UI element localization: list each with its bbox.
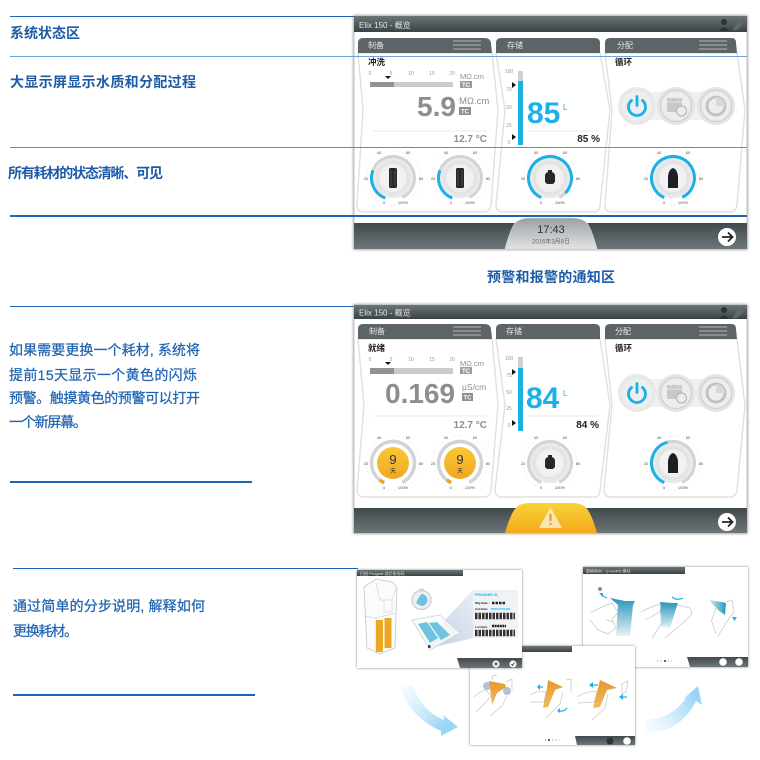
panel: preparation: TC <box>464 396 472 402</box>
gauge: cartridge 2 <box>431 150 491 206</box>
panel: dispensing: 分配 <box>615 327 631 336</box>
label: system status area: 系统状态区 <box>10 25 80 41</box>
gauge: tank: 100% <box>555 200 566 205</box>
gauge: final filter <box>644 435 704 491</box>
panel: preparation: 20 <box>449 357 455 363</box>
gauge: cartridge 2, 9 days <box>431 435 491 491</box>
gauge: cartridge 2: 40 <box>444 150 449 155</box>
text block: step-by-step explanation: 更换耗材。 <box>13 623 78 639</box>
bottom bar with clock <box>354 218 747 249</box>
gauge: cartridge 2, 9 days: 9 <box>456 452 464 467</box>
gauge: cartridge 1, 9 days <box>364 435 424 491</box>
label: consumables status: 所有耗材的状态清晰、可见 <box>8 165 163 181</box>
panel: storage <box>495 324 610 497</box>
panel: storage: 存储 <box>506 326 522 336</box>
gauge: final filter: 20 <box>644 176 649 181</box>
gauge: cartridge 2: 20 <box>431 176 436 181</box>
bottom bar with clock: 17:43 <box>537 224 565 236</box>
gauge: cartridge 2: 100% <box>465 200 476 205</box>
panel: storage: L <box>563 389 568 398</box>
panel: storage: 85 % <box>577 134 600 145</box>
screen A: identification of consumable <box>357 570 522 668</box>
panel: preparation: 0 <box>369 71 372 77</box>
panel: storage: 100 <box>505 356 513 362</box>
step: squeeze <box>474 675 512 716</box>
panel: dispensing: 循环 <box>615 57 633 67</box>
illustration: box and magnifier <box>412 590 473 650</box>
panel: preparation <box>357 324 498 497</box>
panel: storage: 0 <box>508 423 511 429</box>
gauge: cartridge 2: 60 <box>473 150 478 155</box>
gauge: cartridge 2, 9 days: 80 <box>486 461 491 466</box>
panel: preparation: 制备 <box>368 40 384 50</box>
illustration: timer <box>412 589 431 610</box>
step: twist <box>530 679 571 718</box>
illustration: water system cabinet <box>364 579 397 654</box>
gauge: cartridge 1, 9 days: 9 <box>389 452 397 467</box>
gauge: final filter: 40 <box>657 435 662 440</box>
screen C: hands with blue cartridge: 更换耗材 - Q-GARD 模块 <box>586 568 631 574</box>
panel: storage: 100 <box>505 69 513 75</box>
gauge: cartridge 2, 9 days: 100% <box>465 485 476 490</box>
gauge: cartridge 2: 80 <box>486 176 491 181</box>
gauge: final filter: 80 <box>699 176 704 181</box>
panel: preparation: 制备 <box>369 326 385 336</box>
gauge: cartridge 1, 9 days: 0 <box>383 485 386 490</box>
panel: storage: L <box>563 103 568 112</box>
panel: preparation: 0 <box>369 357 372 363</box>
gauge: cartridge 2, 9 days: 60 <box>473 435 478 440</box>
gauge: final filter <box>644 150 704 206</box>
gauge: cartridge 1: 80 <box>419 176 424 181</box>
panel: preparation: 15 <box>429 357 435 363</box>
panel: preparation: 15 <box>429 71 435 77</box>
gauge: cartridge 1 <box>364 150 424 206</box>
gauge: cartridge 1: 20 <box>364 176 369 181</box>
screen 2 frame <box>354 305 747 533</box>
arrow: up to step 3 <box>645 686 702 733</box>
label: alert notification area: 预警和报警的通知区 <box>487 269 615 285</box>
panel: preparation: 12.7 °C <box>454 134 487 145</box>
panel: storage: 0 <box>508 140 511 146</box>
gauge: cartridge 2, 9 days: 天 <box>457 468 463 475</box>
panel: preparation: 就绪 <box>368 343 386 353</box>
panel: preparation: TC <box>462 83 471 89</box>
panel: preparation: TC <box>462 369 471 375</box>
gauge: tank: 100% <box>555 485 566 490</box>
gauge: final filter: 100% <box>678 485 689 490</box>
gauge: cartridge 2: 0 <box>450 200 453 205</box>
arrow: down to step 2 <box>400 685 458 736</box>
panel: storage <box>496 38 610 212</box>
panel: preparation: 12.7 °C <box>454 420 487 431</box>
text block: warning explanation <box>9 342 200 430</box>
screen B: hands with orange cartridge <box>470 646 635 745</box>
panel: preparation <box>357 38 498 212</box>
step: remove <box>577 680 628 720</box>
text block: warning explanation: 预警。触摸黄色的预警可以打开 <box>9 390 200 406</box>
panel: storage: 84 <box>526 382 560 415</box>
gauge: cartridge 1: 0 <box>383 200 386 205</box>
panel: preparation: MΩ.cm <box>459 96 489 107</box>
screen 1: overview <box>354 16 747 249</box>
gauge: tank <box>521 435 581 491</box>
label: barcode card: PROGTS0J01 <box>491 607 511 611</box>
panel: preparation: 10 <box>408 357 414 363</box>
gauge: final filter: 60 <box>686 150 691 155</box>
label: large display: 大显示屏显示水质和分配过程 <box>10 74 196 90</box>
panel: storage: 85 <box>527 97 560 130</box>
gauge: cartridge 1, 9 days: 60 <box>406 435 411 440</box>
panel: dispensing <box>605 38 745 212</box>
gauge: final filter: 0 <box>663 200 666 205</box>
screen 1 title bar: Elix 150 - 概览 <box>359 20 411 30</box>
icon group: power, calendar, pie <box>618 87 735 125</box>
gauge: tank: 80 <box>576 461 581 466</box>
gauge: cartridge 2, 9 days: 0 <box>450 485 453 490</box>
panel: preparation: MΩ.cm <box>460 359 484 368</box>
gauge: final filter: 20 <box>644 461 649 466</box>
panel: preparation: 5 <box>390 357 393 363</box>
gauge: tank: 20 <box>521 461 526 466</box>
screen 2 title bar <box>354 305 747 319</box>
label: barcode card: Cat Num. <box>475 607 488 611</box>
panel: dispensing <box>604 324 745 497</box>
gauge: cartridge 1, 9 days: 20 <box>364 461 369 466</box>
text block: warning explanation: 如果需要更换一个耗材, 系统将 <box>9 342 200 358</box>
gauge: final filter: 80 <box>699 461 704 466</box>
panel: preparation: 冲洗 <box>368 57 386 67</box>
text block: step-by-step explanation <box>13 598 205 639</box>
gauge: final filter: 100% <box>678 200 689 205</box>
panel: preparation: 20 <box>449 71 455 77</box>
gauge: cartridge 2, 9 days: 20 <box>431 461 436 466</box>
screen 2: warning state <box>354 305 747 533</box>
gauge: cartridge 1: 100% <box>398 200 409 205</box>
screen 2 title bar: Elix 150 - 概览 <box>359 308 411 318</box>
gauge: cartridge 1, 9 days: 100% <box>398 485 409 490</box>
gauge: cartridge 1: 40 <box>377 150 382 155</box>
gauge: tank: 80 <box>576 176 581 181</box>
gauge: final filter: 0 <box>663 485 666 490</box>
text block: warning explanation: 提前15天显示一个黄色的闪烁 <box>9 367 197 383</box>
gauge: tank: 0 <box>540 485 543 490</box>
panel: dispensing: 分配 <box>617 41 633 50</box>
screen 1 frame <box>354 16 747 249</box>
panel: storage: 25 <box>506 406 512 412</box>
panel: preparation: 0.169 <box>385 378 455 409</box>
gauge: cartridge 1: 60 <box>406 150 411 155</box>
label: barcode card: Mfg Date: <box>475 601 489 605</box>
gauge: tank: 40 <box>534 150 539 155</box>
label: barcode card <box>473 590 518 638</box>
panel: preparation: 10 <box>408 71 414 77</box>
gauge: cartridge 1, 9 days: 天 <box>390 468 396 475</box>
text block: warning explanation: 一个新屏幕。 <box>9 414 87 430</box>
panel: preparation: 5.9 <box>417 91 456 122</box>
panel: storage: 50 <box>506 105 512 111</box>
bottom bar with clock: 2016年3月8日 <box>532 238 570 246</box>
screen C: hands with blue cartridge <box>583 567 748 667</box>
screen 1 title bar <box>354 16 747 32</box>
panel: preparation: MΩ.cm <box>460 72 484 81</box>
bottom bar with warning tab <box>354 503 747 533</box>
panel: preparation: 5 <box>390 71 393 77</box>
panel: storage: 存储 <box>507 40 523 50</box>
panel: preparation: TC <box>461 110 470 116</box>
panel: dispensing: 循环 <box>615 343 633 353</box>
gauge: cartridge 1, 9 days: 40 <box>377 435 382 440</box>
gauge: tank: 20 <box>521 176 526 181</box>
text block: step-by-step explanation: 通过简单的分步说明, 解释如何 <box>13 598 205 614</box>
gauge: final filter: 60 <box>686 435 691 440</box>
panel: storage: 25 <box>506 123 512 129</box>
gauge: tank <box>521 150 581 206</box>
panel: storage: 84 % <box>576 420 599 431</box>
gauge: tank: 60 <box>563 435 568 440</box>
panel: storage: 75 <box>506 87 512 93</box>
gauge: cartridge 2, 9 days: 40 <box>444 435 449 440</box>
panel: preparation: µS/cm <box>462 382 486 392</box>
gauge: final filter: 40 <box>657 150 662 155</box>
gauge: tank: 60 <box>563 150 568 155</box>
icon group: power, calendar, pie <box>618 374 735 412</box>
label: barcode card: Lot Num. <box>475 625 488 629</box>
label: barcode card: PROGARD XL <box>475 593 499 597</box>
gauge: cartridge 1, 9 days: 80 <box>419 461 424 466</box>
panel: storage: 50 <box>506 390 512 396</box>
gauge: tank: 0 <box>540 200 543 205</box>
screen A: identification of consumable: 扫描 Progard 滤芯条形码 <box>360 570 404 576</box>
gauge: tank: 40 <box>534 435 539 440</box>
panel: storage: 75 <box>506 373 512 379</box>
